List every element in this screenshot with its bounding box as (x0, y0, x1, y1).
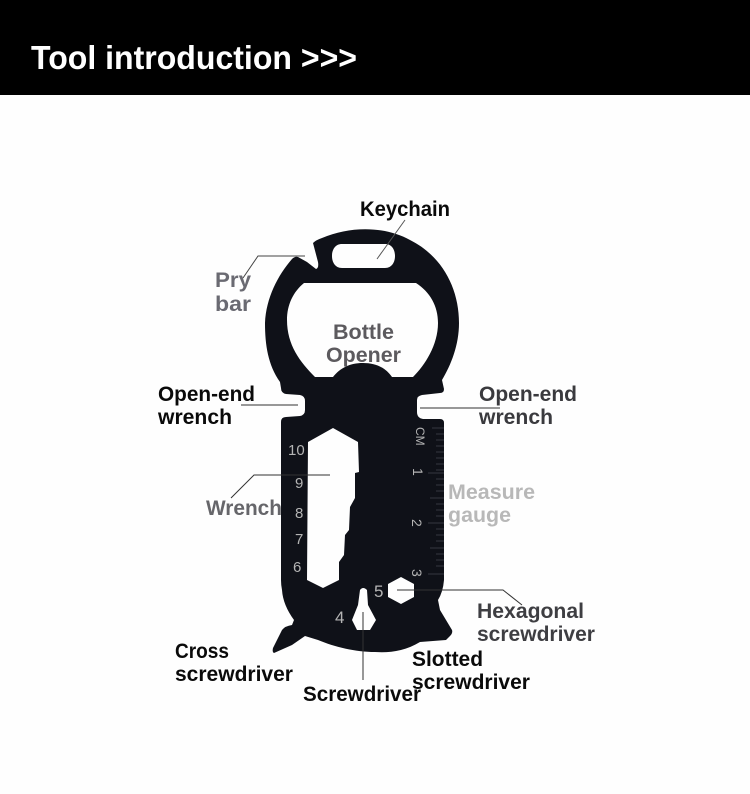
wrench size numbers: 10 (288, 442, 305, 459)
wrench size numbers (288, 442, 383, 627)
label: open-end wrench left (157, 383, 298, 429)
label: measure gauge (448, 481, 535, 527)
wrench size numbers: 6 (293, 559, 301, 576)
label: pry bar (215, 256, 305, 316)
label: wrench (206, 475, 330, 520)
label: hexagonal screwdriver: Hexagonal (477, 600, 584, 623)
label: open-end wrench left: wrench (157, 406, 232, 429)
label: open-end wrench right: Open-end (479, 383, 577, 406)
multi-tool card (265, 229, 459, 653)
label: measure gauge: Measure (448, 481, 535, 504)
label: open-end wrench right: wrench (478, 406, 553, 429)
label: slotted screwdriver: Slotted (412, 648, 483, 671)
label: pry bar: Pry (215, 269, 251, 292)
label: keychain: Keychain (360, 198, 450, 221)
wrench size numbers: 9 (295, 475, 303, 492)
ruler numbers: 3 (409, 569, 425, 577)
title: Tool introduction >>> (31, 39, 357, 76)
label: screwdriver (303, 612, 421, 706)
label: open-end wrench right (420, 383, 577, 429)
label: hexagonal screwdriver: screwdriver (477, 623, 595, 646)
label: cross screwdriver: Cross (175, 640, 229, 663)
label: slotted screwdriver (412, 648, 530, 694)
label: bottle opener: Bottle (333, 321, 394, 344)
ruler numbers (409, 427, 427, 577)
label: cross screwdriver (175, 640, 293, 686)
ruler ticks (428, 428, 444, 574)
label: bottle opener (326, 321, 401, 367)
label: hexagonal screwdriver (397, 590, 595, 646)
label: measure gauge: gauge (448, 504, 511, 527)
wrench size numbers: 5 (374, 582, 383, 601)
header banner (0, 0, 750, 95)
label: bottle opener: Opener (326, 344, 401, 367)
wrench size numbers: 7 (295, 531, 303, 548)
wrench size numbers: 8 (295, 505, 303, 522)
label: wrench: Wrench (206, 497, 282, 520)
label: pry bar: bar (215, 293, 251, 316)
label: keychain (360, 198, 450, 259)
ruler numbers: 1 (410, 468, 426, 476)
ruler numbers: 2 (409, 519, 425, 527)
label: screwdriver: Screwdriver (303, 683, 421, 706)
ruler numbers: CM (413, 427, 427, 446)
label: cross screwdriver: screwdriver (175, 663, 293, 686)
label: slotted screwdriver: screwdriver (412, 671, 530, 694)
label: open-end wrench left: Open-end (158, 383, 255, 406)
wrench size numbers: 4 (335, 608, 344, 627)
